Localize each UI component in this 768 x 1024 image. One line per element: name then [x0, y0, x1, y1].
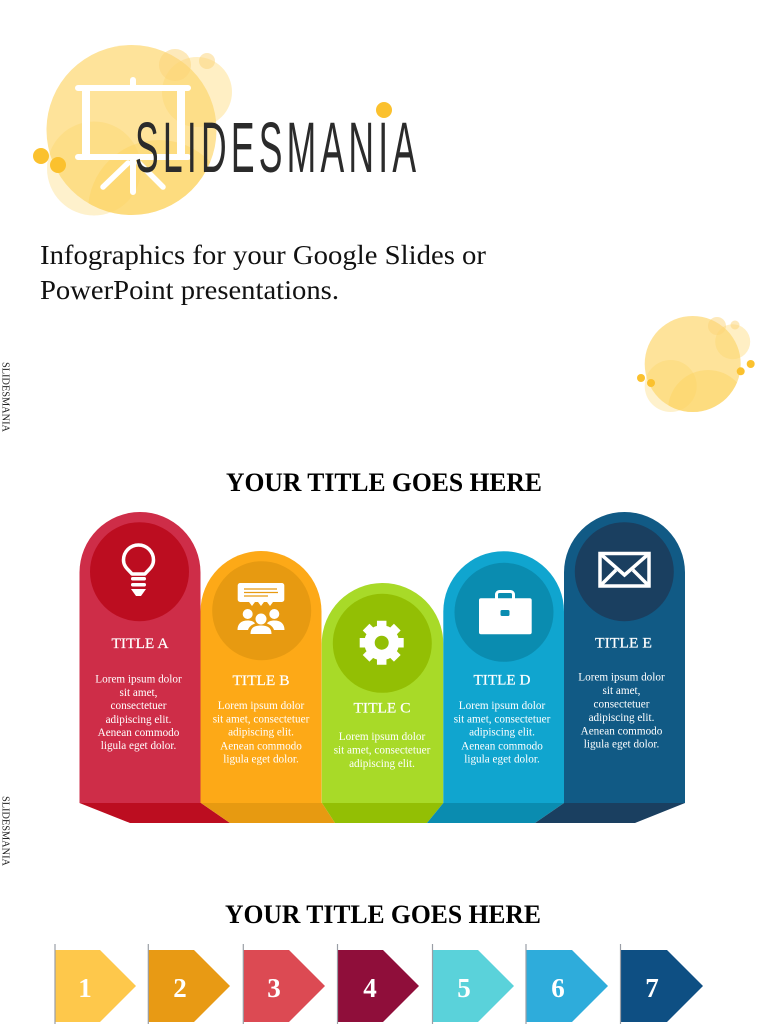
- icon: light bulb: [124, 545, 154, 596]
- decorative bubbles: right: [637, 316, 755, 412]
- text E: consectetuer: [594, 699, 650, 711]
- text E: Aenean commodo: [581, 725, 663, 737]
- title C: TITLE C: [354, 700, 410, 716]
- logo wordmark: SLIDESMANIA: [135, 107, 416, 187]
- arrow 6: [526, 944, 608, 1024]
- panel: arch cards: [80, 512, 685, 823]
- text B: ligula eget dolor.: [223, 754, 299, 766]
- arrow 2: [148, 944, 230, 1024]
- panel: card C: [322, 583, 443, 823]
- icon: gear: [360, 621, 404, 665]
- text B: sit amet, consectetuer: [213, 713, 310, 725]
- panel: card A: [80, 512, 230, 823]
- text C: [334, 731, 431, 770]
- text E: adipiscing elit.: [589, 712, 655, 724]
- arrow 3: 3: [267, 973, 281, 1003]
- arrow 3: [243, 944, 325, 1024]
- text E: Lorem ipsum dolor: [578, 672, 665, 684]
- logo bubbles: [33, 45, 392, 216]
- arrow 1: [55, 944, 136, 1024]
- text C: adipiscing elit.: [349, 758, 415, 770]
- arrow 2: 2: [173, 973, 187, 1003]
- text D: adipiscing elit.: [469, 727, 535, 739]
- arrow 7: [620, 944, 703, 1024]
- arrow 5: 5: [457, 973, 471, 1003]
- text A: [95, 674, 182, 752]
- text D: Aenean commodo: [461, 740, 543, 752]
- panel: card B: [200, 551, 335, 823]
- arrow 7: 7: [645, 973, 659, 1003]
- intro text: PowerPoint presentations.: [40, 275, 339, 305]
- text B: adipiscing elit.: [228, 727, 294, 739]
- panel: card D: [427, 551, 564, 823]
- title E: TITLE E: [595, 636, 652, 652]
- text A: Aenean commodo: [98, 727, 180, 739]
- title A: TITLE A: [112, 636, 169, 652]
- text E: ligula eget dolor.: [584, 738, 659, 750]
- text E: [578, 672, 665, 750]
- text C: sit amet, consectetuer: [334, 744, 431, 756]
- arrow 5: [432, 944, 514, 1024]
- text B: Aenean commodo: [220, 740, 302, 752]
- panel: card E: [535, 512, 685, 823]
- icon: discussion group: [238, 583, 284, 634]
- text A: consectetuer: [111, 700, 167, 712]
- icon: envelope: [600, 554, 649, 586]
- text D: sit amet, consectetuer: [454, 713, 551, 725]
- text D: [454, 700, 551, 766]
- text A: adipiscing elit.: [106, 714, 172, 726]
- text C: Lorem ipsum dolor: [339, 731, 425, 743]
- title D: TITLE D: [474, 672, 530, 688]
- arrow 4: [338, 944, 419, 1024]
- icon: briefcase: [479, 592, 532, 634]
- text B: Lorem ipsum dolor: [218, 700, 304, 712]
- text A: Lorem ipsum dolor: [95, 674, 182, 686]
- text D: Lorem ipsum dolor: [459, 700, 545, 712]
- arrow 6: 6: [551, 973, 565, 1003]
- text A: ligula eget dolor.: [101, 740, 176, 752]
- text E: sit amet,: [603, 685, 641, 697]
- arrow 4: 4: [363, 973, 377, 1003]
- text D: ligula eget dolor.: [464, 754, 540, 766]
- arrow row: [55, 944, 703, 1024]
- heading: first section: YOUR TITLE GOES HERE: [226, 468, 542, 497]
- text A: sit amet,: [120, 687, 158, 699]
- logo: SlidesMania: [33, 45, 416, 216]
- text B: [213, 700, 310, 766]
- arrow 1: 1: [78, 973, 92, 1003]
- icon: presentation board: [78, 80, 188, 192]
- intro text: Infographics for your Google Slides or: [40, 240, 486, 270]
- title B: TITLE B: [232, 673, 290, 689]
- intro text: [40, 240, 486, 305]
- heading: second section: YOUR TITLE GOES HERE: [225, 900, 541, 929]
